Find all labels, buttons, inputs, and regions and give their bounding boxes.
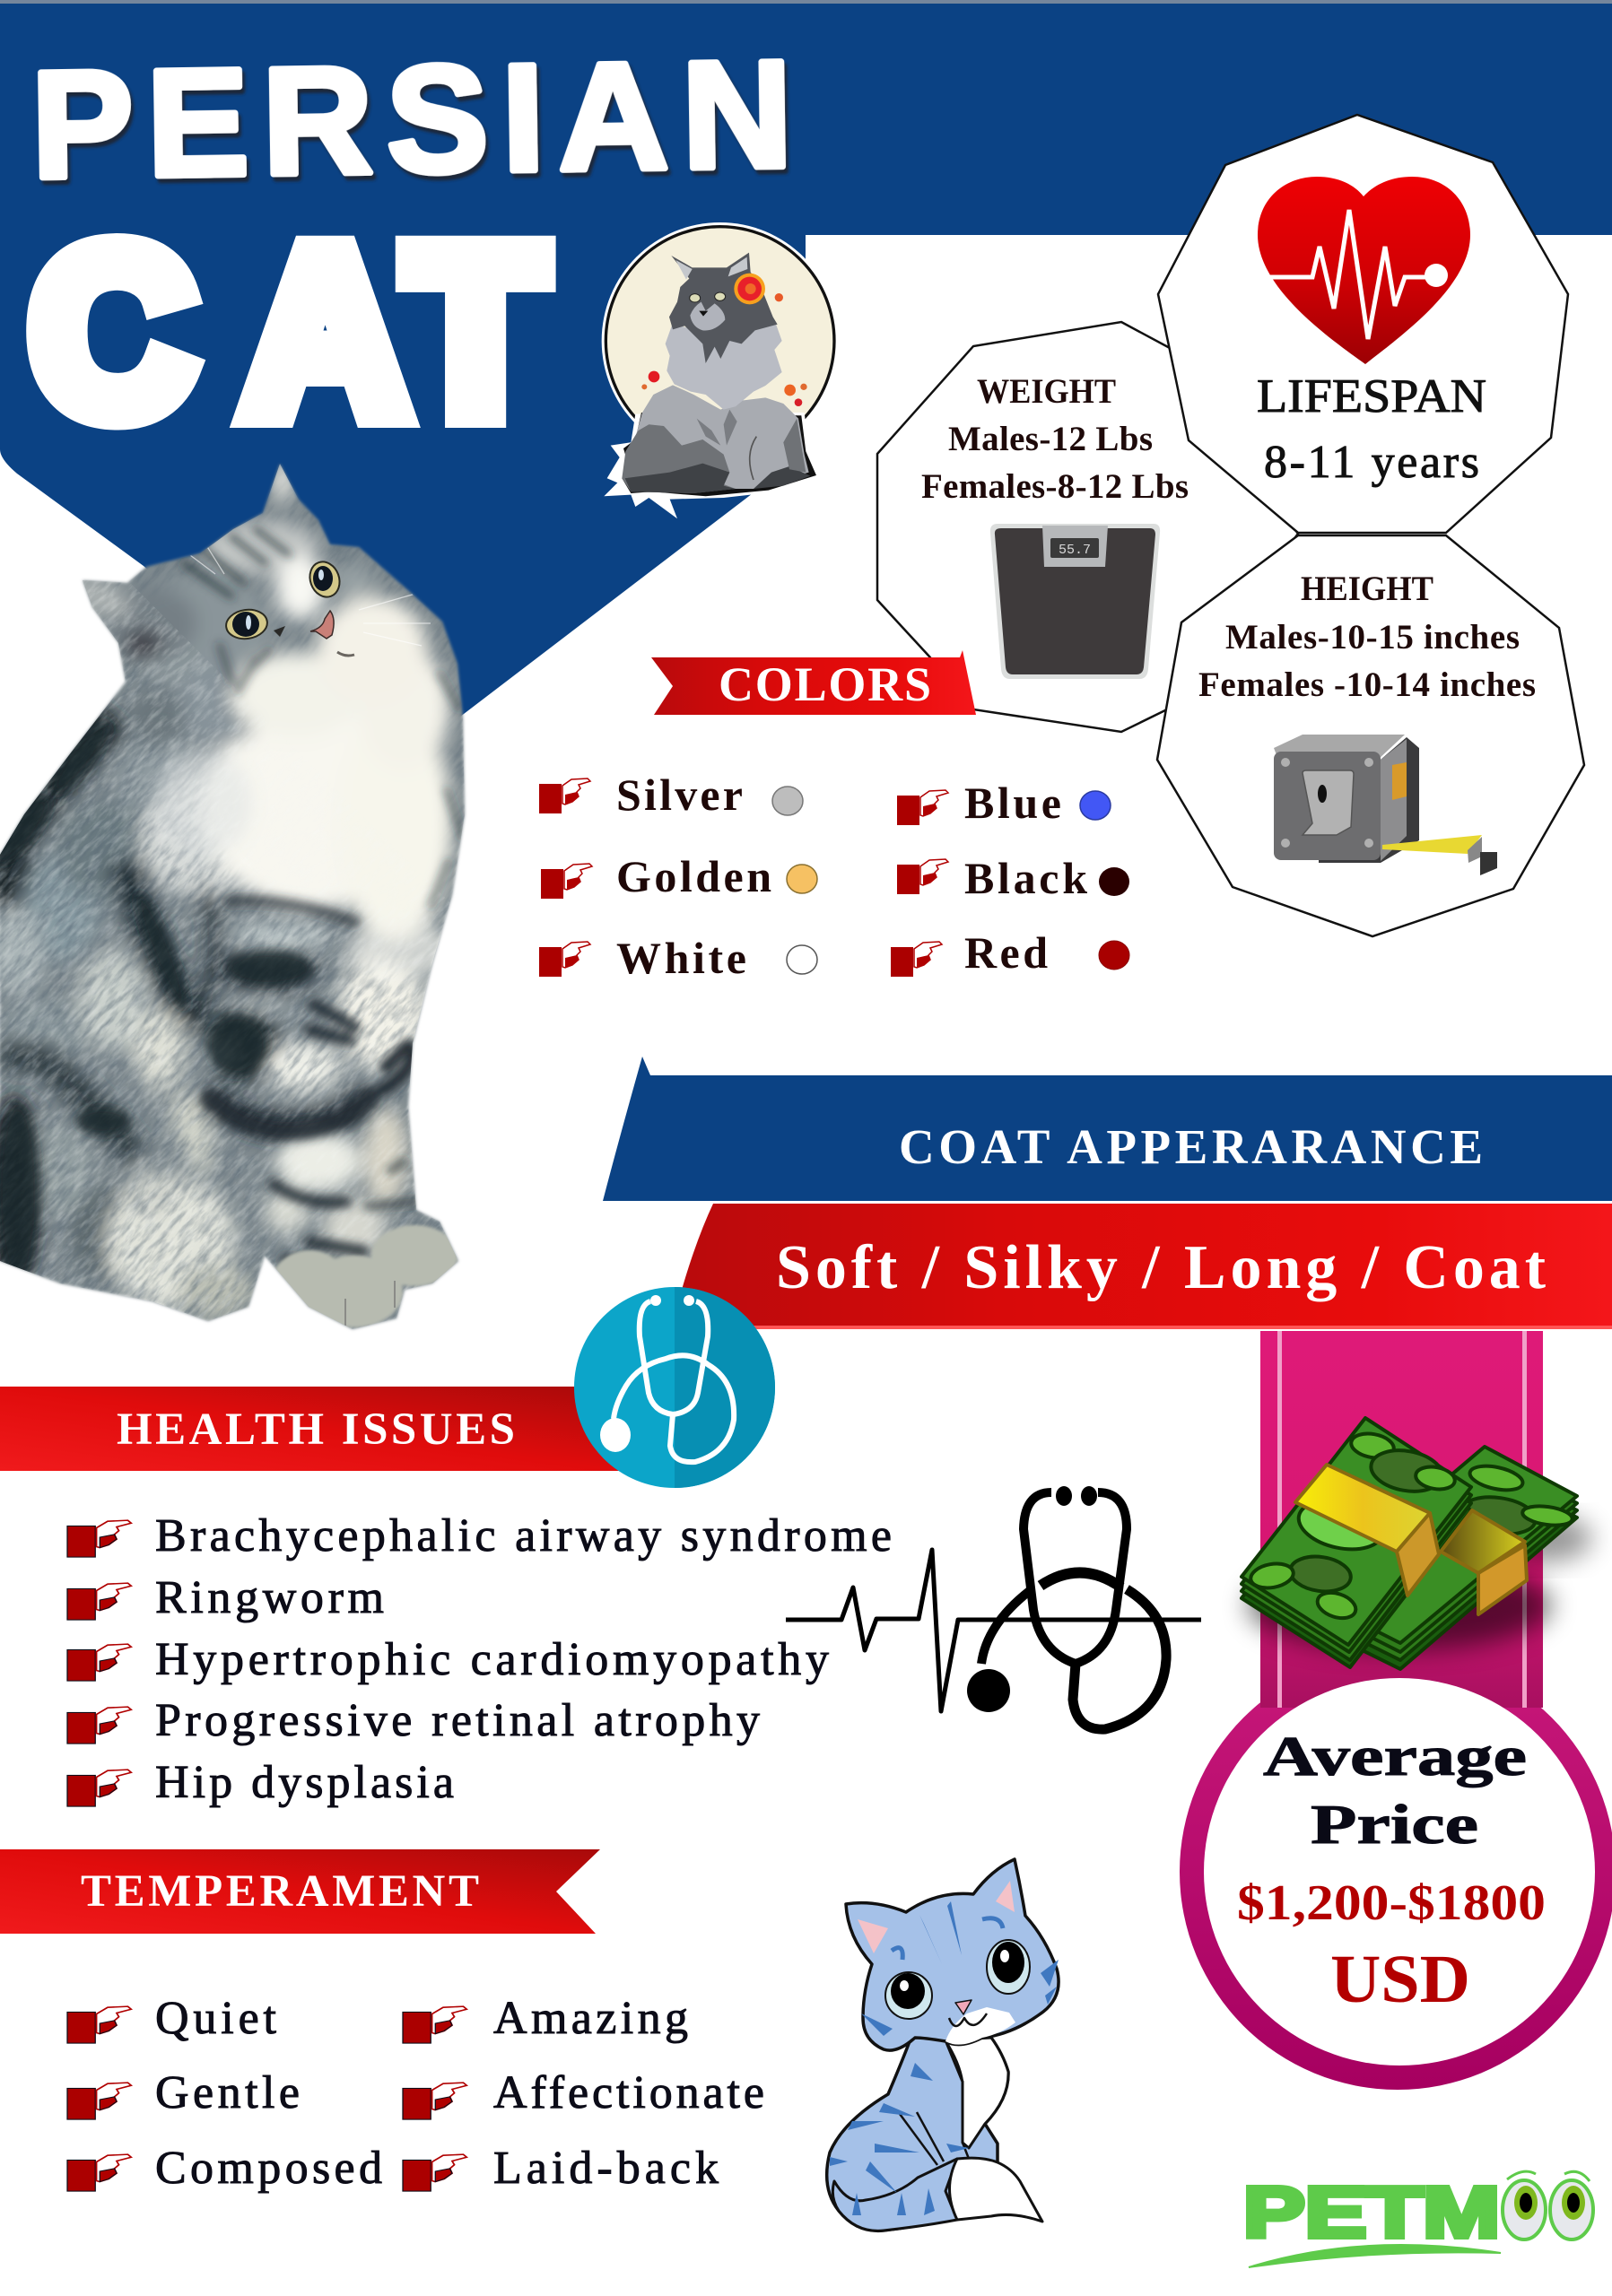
icon: heartbeat line with stethoscope bbox=[786, 1486, 1201, 1729]
color: black bbox=[897, 853, 1129, 903]
badge: illustrated grey cat bbox=[602, 222, 839, 518]
icon: bathroom scale: 55.7 bbox=[1059, 543, 1091, 558]
panel: weight bbox=[877, 322, 1298, 732]
icon: tape measure bbox=[1274, 735, 1497, 875]
cat eyes and nose bbox=[224, 558, 354, 656]
lifespan value: 8-11 years bbox=[1264, 437, 1479, 488]
kitten: head bbox=[846, 1859, 1059, 2050]
icon: heart with pulse bbox=[1258, 177, 1470, 364]
item: Amazing: Amazing bbox=[493, 1993, 688, 2044]
item: Brachycephalic airway syndrome: Brachycephalic airway syndrome bbox=[155, 1510, 892, 1561]
weight text bbox=[921, 372, 1189, 506]
cat: tabby stripes bbox=[184, 529, 463, 1269]
price label: Average bbox=[1263, 1726, 1527, 1787]
color: silver bbox=[539, 770, 803, 820]
band: coat description bbox=[671, 1204, 1612, 1329]
badge: chest bbox=[666, 320, 782, 410]
cat: fur texture bbox=[0, 500, 465, 1329]
icon: stethoscope badge bbox=[574, 1287, 775, 1488]
color: silver: Silver bbox=[616, 770, 743, 820]
kitten: tail bbox=[832, 2159, 957, 2231]
color: red bbox=[891, 927, 1129, 978]
price value bbox=[1237, 1875, 1546, 2017]
logo: Petmoo: PETM bbox=[1243, 2172, 1500, 2252]
band: coat description: Soft / Silky / Long / Coat bbox=[776, 1233, 1546, 1302]
badge: body bbox=[626, 385, 809, 489]
temperament list bbox=[67, 1993, 764, 2194]
cat: paws bbox=[272, 1225, 457, 1327]
weight text: Males-12 Lbs bbox=[948, 420, 1153, 458]
height text: Females -10-14 inches bbox=[1198, 665, 1536, 704]
height text: HEIGHT bbox=[1301, 570, 1433, 608]
photo: fluffy silver tabby Persian cat bbox=[0, 463, 775, 1463]
item: Quiet: Quiet bbox=[155, 1993, 277, 2044]
price value: USD bbox=[1330, 1942, 1470, 2017]
color: white: White bbox=[616, 933, 746, 983]
item: Gentle bbox=[67, 2067, 300, 2119]
cat: white chest and head fur bbox=[60, 457, 453, 1260]
height text: Males-10-15 inches bbox=[1225, 618, 1520, 657]
kitten: white chest bbox=[945, 2038, 1008, 2148]
illustration: blue kitten bbox=[827, 1859, 1059, 2231]
item: Quiet bbox=[67, 1993, 277, 2044]
title: PERSIAN: PERSIAN bbox=[30, 29, 793, 211]
icon: stacks of money bbox=[1242, 1418, 1592, 1669]
panel: lifespan bbox=[1158, 115, 1568, 533]
panel: average price ring bbox=[1180, 1654, 1612, 2090]
cat: light fur highlights bbox=[0, 581, 450, 1319]
money: right stack bbox=[1308, 1447, 1577, 1669]
weight text: Females-8-12 Lbs bbox=[921, 467, 1189, 506]
price label: Price bbox=[1311, 1795, 1478, 1856]
ribbon: price tag bbox=[1260, 1331, 1543, 1708]
item: Hip dysplasia: Hip dysplasia bbox=[155, 1757, 454, 1808]
color: red: Red bbox=[964, 927, 1048, 978]
health issues list bbox=[67, 1510, 892, 1808]
band: coat appearance bbox=[603, 1057, 1612, 1201]
weight text: WEIGHT bbox=[977, 372, 1116, 411]
item: Composed: Composed bbox=[155, 2143, 382, 2194]
band: coat appearance: COAT APPERARANCE bbox=[899, 1119, 1483, 1174]
item: Laid-back: Laid-back bbox=[493, 2143, 719, 2194]
logo eyes bbox=[1503, 2171, 1593, 2239]
money: paper bands bbox=[1295, 1465, 1527, 1614]
ribbon: health issues: HEALTH ISSUES bbox=[117, 1405, 515, 1455]
lifespan text: LIFESPAN bbox=[1257, 370, 1486, 422]
ribbon: temperament: TEMPERAMENT bbox=[81, 1866, 479, 1917]
color: black: Black bbox=[964, 853, 1087, 903]
item: Ringworm: Ringworm bbox=[155, 1572, 384, 1623]
color: blue: Blue bbox=[964, 778, 1061, 828]
badge: black outline bbox=[622, 413, 816, 496]
cat: dark and mid tones of coat bbox=[0, 713, 426, 1318]
badge: head and mane bbox=[669, 253, 778, 363]
item: Amazing bbox=[403, 1993, 688, 2044]
ribbon: health issues bbox=[0, 1387, 619, 1471]
kitten: front leg lines bbox=[900, 2033, 969, 2165]
kitten: eyes and nose bbox=[885, 1972, 932, 2019]
panel: average price bbox=[1204, 1678, 1595, 2066]
ribbon: temperament bbox=[0, 1849, 600, 1934]
kitten: body bbox=[827, 2037, 1008, 2231]
item: Hypertrophic cardiomyopathy: Hypertrophic cardiomyopathy bbox=[155, 1634, 829, 1685]
item: Gentle: Gentle bbox=[155, 2067, 300, 2118]
title: CAT: CAT bbox=[31, 201, 544, 463]
item: Progressive retinal atrophy: Progressive retinal atrophy bbox=[155, 1695, 760, 1746]
ribbon: colors: COLORS bbox=[719, 657, 931, 711]
panel: height bbox=[1157, 535, 1584, 936]
money: left stack bbox=[1242, 1418, 1471, 1667]
price label bbox=[1263, 1726, 1527, 1856]
color: golden bbox=[541, 851, 817, 901]
icon: bathroom scale bbox=[990, 524, 1160, 679]
color: blue bbox=[897, 778, 1111, 828]
color: golden: Golden bbox=[616, 851, 771, 901]
color: white bbox=[539, 933, 817, 983]
logo: Petmoo bbox=[1243, 2171, 1593, 2267]
price value: $1,200-$1800 bbox=[1237, 1875, 1546, 1931]
cat: dark accent patches bbox=[0, 715, 312, 1283]
height text bbox=[1198, 570, 1536, 704]
ribbon: colors bbox=[651, 650, 976, 715]
item: Affectionate: Affectionate bbox=[493, 2067, 764, 2118]
badge: spiky white outline bbox=[604, 413, 828, 518]
kitten: stripes bbox=[830, 1901, 1059, 2215]
blue header banner bbox=[0, 4, 1612, 780]
colors list bbox=[539, 770, 1129, 983]
